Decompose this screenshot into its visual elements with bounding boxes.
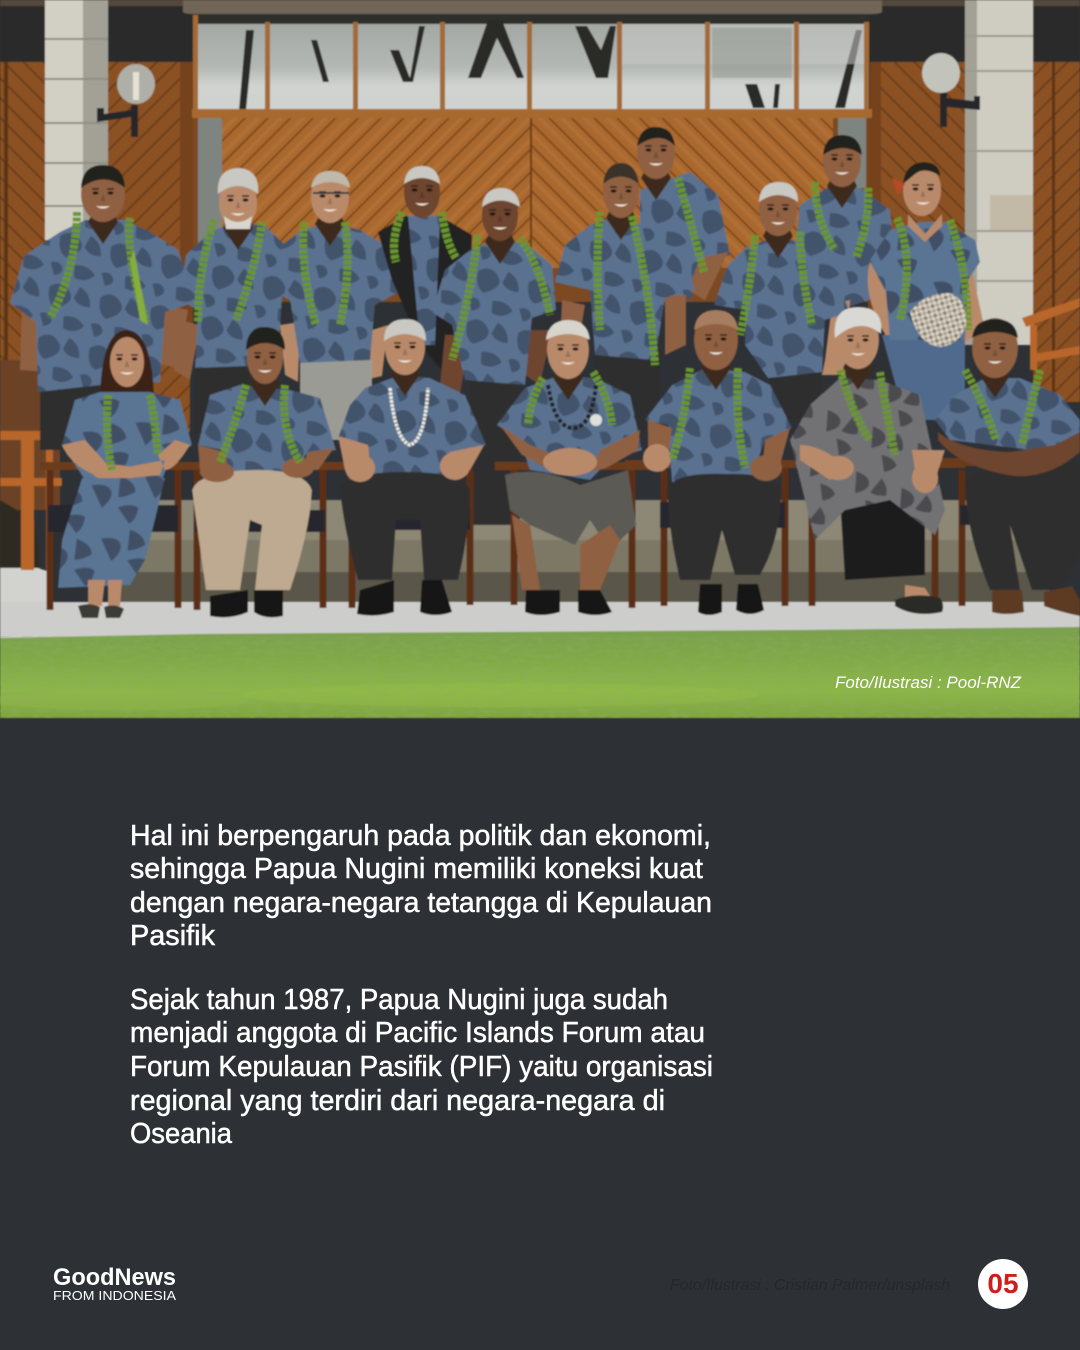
text block: paragraph two: Sejak tahun 1987, Papua Nugini juga sudah	[130, 984, 668, 1016]
person: seated man with shell necklace	[338, 319, 486, 616]
grass lawn	[0, 627, 1080, 718]
person: standing seventh in blue shirt	[714, 182, 850, 420]
wooden doors	[198, 118, 866, 268]
upper window	[192, 14, 872, 118]
steps behind chairs	[0, 360, 1050, 615]
text block: paragraph one: sehingga Papua Nugini memiliki koneksi kuat	[130, 853, 703, 885]
page number badge	[978, 1259, 1028, 1309]
text block: paragraph two: Oseania	[130, 1118, 233, 1150]
person: standing fourth in black jacket	[378, 166, 472, 380]
icon: wall lamps	[97, 53, 980, 137]
roof beam	[183, 0, 882, 14]
text block: paragraph one: dengan negara-negara tetangga di Kepulauan	[130, 887, 712, 919]
person: seated man at far right	[935, 318, 1080, 616]
icon: woven fan	[910, 293, 966, 347]
person: standing left in blue shirt	[10, 165, 195, 450]
text block: paragraph one	[130, 820, 712, 952]
logo: GoodNews from Indonesia: FROM INDONESIA	[53, 1288, 176, 1303]
text block: paragraph two: Forum Kepulauan Pasifik (PIF) yaitu organisasi	[130, 1051, 713, 1083]
page number badge: 05	[987, 1268, 1019, 1299]
background photo credit (faint): Foto/Ilustrasi : Cristian Palmer/unsplash	[670, 1277, 950, 1294]
photo: Pacific Islands Forum leaders group portrait	[0, 0, 1080, 718]
person: seated woman in dress	[58, 330, 192, 618]
person: seated woman in grey dress	[790, 307, 945, 614]
person: back row far rear left	[637, 127, 730, 300]
text block: paragraph two: regional yang terdiri dari negara-negara di	[130, 1085, 665, 1117]
stone pillars	[45, 0, 1033, 345]
text block: paragraph two	[130, 984, 713, 1150]
person: standing woman with woven fan	[868, 162, 985, 420]
person: seated man in grey sulu	[497, 320, 642, 615]
person: seated man in blue shirt and dark trousers	[643, 310, 792, 615]
person: standing fifth in blue shirt	[432, 188, 556, 525]
logo: GoodNews from Indonesia: GoodNews	[53, 1264, 176, 1291]
person: standing second in blue shirt	[174, 168, 285, 435]
pavement	[0, 602, 1080, 640]
logo: GoodNews from Indonesia	[53, 1264, 176, 1303]
chairs row	[40, 458, 1045, 610]
person: standing sixth in blue shirt	[555, 163, 695, 430]
grass texture overlay	[0, 636, 1080, 718]
building facade	[0, 0, 1080, 432]
text block: paragraph one: Hal ini berpengaruh pada politik dan ekonomi,	[130, 820, 711, 852]
person: back row far rear right	[795, 135, 897, 310]
person: standing third in blue shirt with glasses	[270, 171, 402, 440]
text block: paragraph two: menjadi anggota di Pacific Islands Forum atau	[130, 1017, 705, 1049]
wooden handrails	[0, 298, 1080, 570]
photo credit: Foto/Ilustrasi : Pool-RNZ	[835, 673, 1022, 692]
person: seated man in beige trousers	[192, 327, 336, 617]
text block: paragraph one: Pasifik	[130, 920, 215, 952]
panel: dark background	[0, 718, 1080, 1350]
